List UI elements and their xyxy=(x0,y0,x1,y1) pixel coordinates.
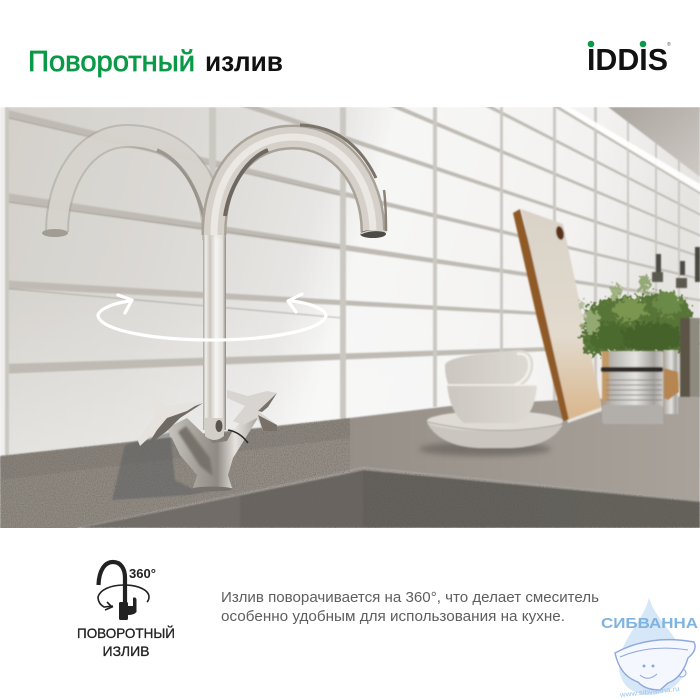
watermark: Sibvanna xyxy=(601,597,698,699)
description text: особенно удобным для использования на кухне. xyxy=(221,608,565,625)
title xyxy=(28,46,283,78)
icon: swivel faucet 360 xyxy=(98,562,156,620)
faucet base and handles xyxy=(138,390,277,492)
tiled wall xyxy=(0,107,700,456)
left handle xyxy=(147,403,203,446)
logo: IDDIS: ® xyxy=(667,41,671,48)
icon: swivel faucet 360: 360° xyxy=(129,566,156,581)
title: излив xyxy=(205,46,283,77)
oil bottles xyxy=(652,247,700,397)
right handle xyxy=(227,390,277,431)
icon label xyxy=(77,624,175,659)
countertop granite grain xyxy=(0,418,700,528)
plates and bowls xyxy=(419,350,563,456)
logo: IDDIS: IDDIS xyxy=(587,42,668,77)
title: Поворотный xyxy=(28,46,195,78)
watermark: Sibvanna: СИБВАННА xyxy=(601,615,698,632)
watermark: Sibvanna: www.sibvanna.ru xyxy=(619,686,680,699)
photo: kitchen scene xyxy=(0,107,700,528)
cutting board xyxy=(513,209,602,423)
icon label: ИЗЛИВ xyxy=(102,643,150,659)
base body xyxy=(168,418,258,488)
ghost spout, left position xyxy=(42,136,214,240)
countertop xyxy=(0,396,700,530)
description text: Излив поворачивается на 360°, что делает смеситель xyxy=(221,589,599,606)
tin cans xyxy=(601,350,679,424)
icon label: ПОВОРОТНЫЙ xyxy=(77,624,175,641)
description text xyxy=(221,589,599,625)
swivel spout, right position xyxy=(214,125,387,238)
rotation arrow xyxy=(98,294,326,340)
herbs xyxy=(578,275,694,354)
faucet stem xyxy=(203,215,226,430)
faucet shadow xyxy=(112,432,208,500)
